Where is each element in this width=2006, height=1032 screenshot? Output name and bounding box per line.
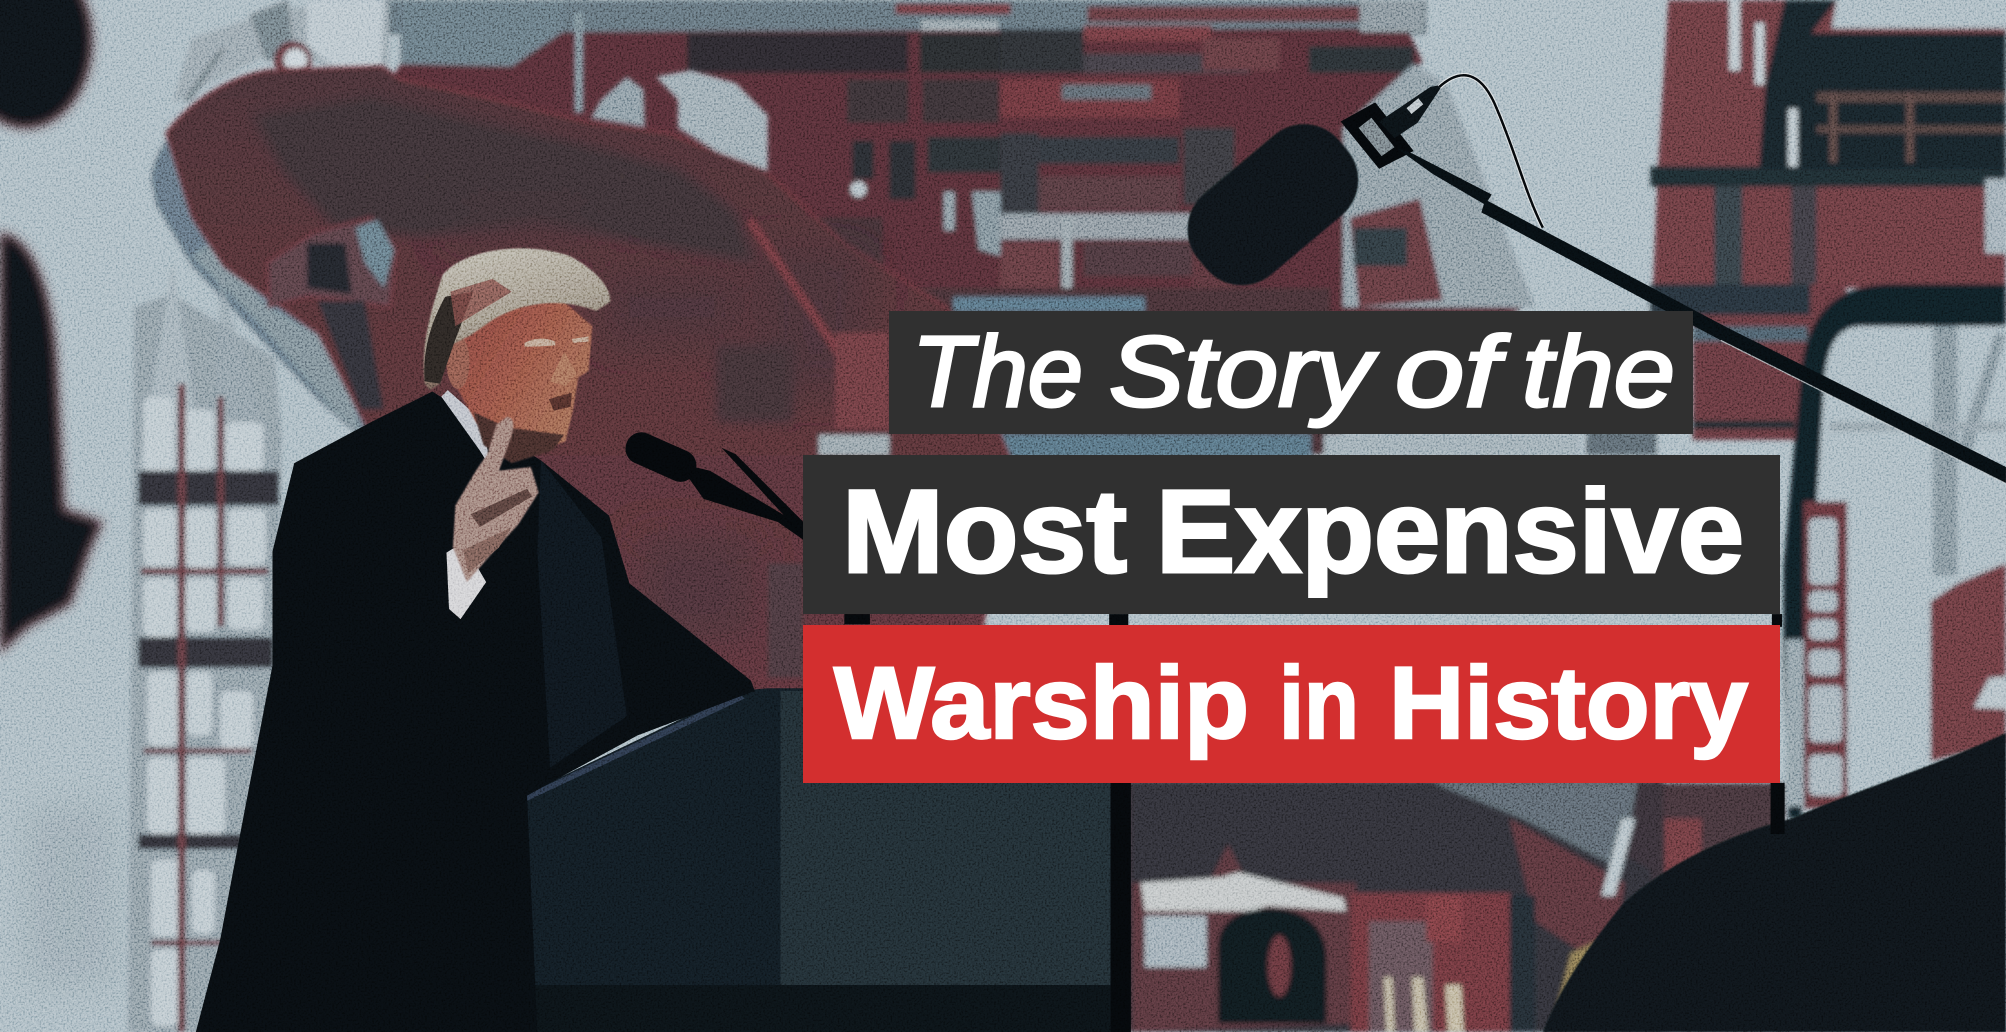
hull diagonal line — [747, 216, 883, 417]
boom pole — [1397, 148, 1492, 205]
ear — [446, 335, 470, 389]
title line 3 — [834, 646, 1748, 760]
title line 1: Story — [1109, 316, 1379, 428]
left scaffolding — [128, 262, 281, 1032]
right crane tower — [1650, 0, 2006, 898]
boom microphone — [1169, 75, 2006, 484]
right red patch — [1930, 563, 2006, 761]
title line 3: History — [1389, 646, 1748, 760]
mic tail — [1379, 84, 1443, 138]
haze near bottom left — [26, 806, 115, 985]
anchor pocket — [267, 217, 397, 307]
title line 1 box — [889, 311, 1693, 434]
scaffold tower right — [1804, 501, 1847, 809]
speaker — [196, 248, 755, 1032]
podium microphone — [621, 427, 803, 540]
title line 3: in — [1279, 646, 1359, 760]
title line 1: of — [1395, 316, 1510, 428]
hull mottling — [448, 179, 870, 640]
hair side dark — [424, 292, 473, 384]
hull grey lower bow — [151, 77, 409, 454]
title line 1 — [912, 316, 1675, 428]
title line 2 — [842, 466, 1744, 598]
windscreen — [1169, 105, 1377, 304]
shirt collar — [441, 390, 490, 467]
foreground dark shape bottom right — [1543, 733, 2006, 1032]
grey building right of ship — [1343, 64, 1535, 307]
title line 2: Expensive — [1156, 466, 1744, 598]
hull dark shadow patch — [253, 96, 755, 262]
lower dark red behind foreground — [1650, 783, 1785, 898]
jaw shadow — [473, 412, 564, 463]
red hair patch — [450, 279, 512, 326]
head — [448, 301, 592, 450]
hand — [453, 417, 539, 582]
crane structure top left of ship — [173, 0, 389, 102]
title line 2 box — [803, 455, 1780, 614]
title line 3: Warship — [834, 646, 1249, 760]
hair — [424, 248, 610, 390]
title line 2: Most — [842, 466, 1127, 598]
title line 3 box — [803, 625, 1780, 783]
title line 1: The — [912, 316, 1083, 428]
grey lighter streak — [192, 243, 365, 441]
shirt cuff — [446, 542, 486, 619]
shock mount — [1341, 102, 1414, 169]
crane arch — [1783, 284, 2006, 819]
hull red body — [166, 67, 1011, 716]
sail white shapes — [656, 70, 768, 170]
left foreground dark blobs — [0, 0, 102, 652]
title line 1: the — [1522, 316, 1675, 428]
arch interior light — [1817, 326, 2006, 787]
bottom shipyard area — [1126, 780, 1663, 1032]
pole — [574, 13, 583, 113]
coat — [196, 391, 755, 1032]
vertical poles — [844, 614, 1785, 1032]
coat lapel shading — [537, 461, 627, 768]
mid darker shade — [716, 345, 793, 422]
title block — [803, 311, 1780, 783]
lectern — [512, 688, 1110, 1032]
superstructure of ship — [384, 0, 1657, 459]
cable — [1439, 75, 1543, 228]
eyes and mouth — [525, 336, 588, 411]
ship hull — [151, 13, 1011, 716]
